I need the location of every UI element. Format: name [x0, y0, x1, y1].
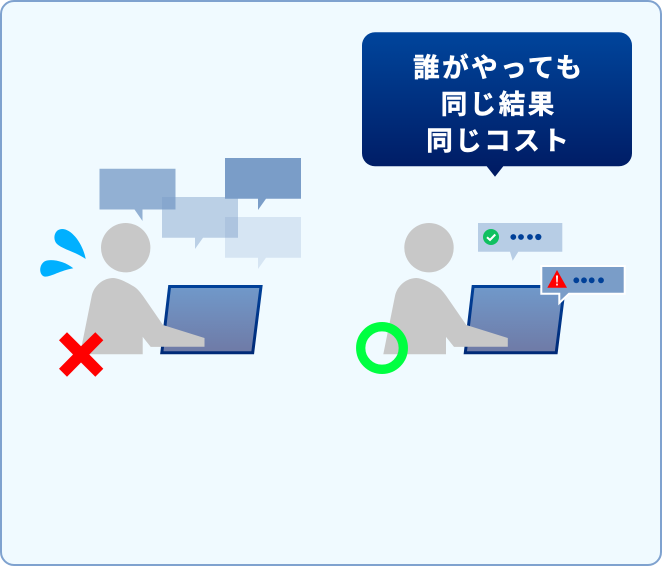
icon: green circle [361, 327, 403, 369]
status dots [510, 234, 541, 240]
speech bubble 4 [225, 217, 301, 269]
icon: sweat drops [40, 229, 86, 277]
status dots [573, 277, 604, 283]
left scene: person overwhelmed [40, 158, 301, 377]
icon: person [80, 223, 204, 354]
icon: person arm over laptop [446, 325, 508, 347]
icon: person [383, 223, 508, 354]
callout: same result same cost [362, 32, 632, 177]
right scene: person with clear notifications [361, 223, 625, 369]
icon: red cross [59, 332, 103, 377]
callout text: 同じコスト [426, 126, 571, 156]
icon: person arm over laptop [143, 325, 204, 347]
icon: laptop [465, 286, 564, 353]
notification: success [478, 223, 562, 261]
callout text: 同じ結果 [441, 90, 557, 120]
speech bubble 2 [162, 197, 238, 249]
speech bubble 3 [225, 158, 301, 210]
callout text [413, 53, 584, 156]
icon: green check [483, 229, 499, 245]
speech bubble 1 [100, 169, 176, 221]
notification: warning [541, 266, 625, 303]
icon: red warning triangle [547, 270, 567, 288]
callout bubble [362, 32, 632, 177]
icon: laptop [162, 286, 261, 353]
callout text: 誰がやっても [413, 53, 584, 83]
